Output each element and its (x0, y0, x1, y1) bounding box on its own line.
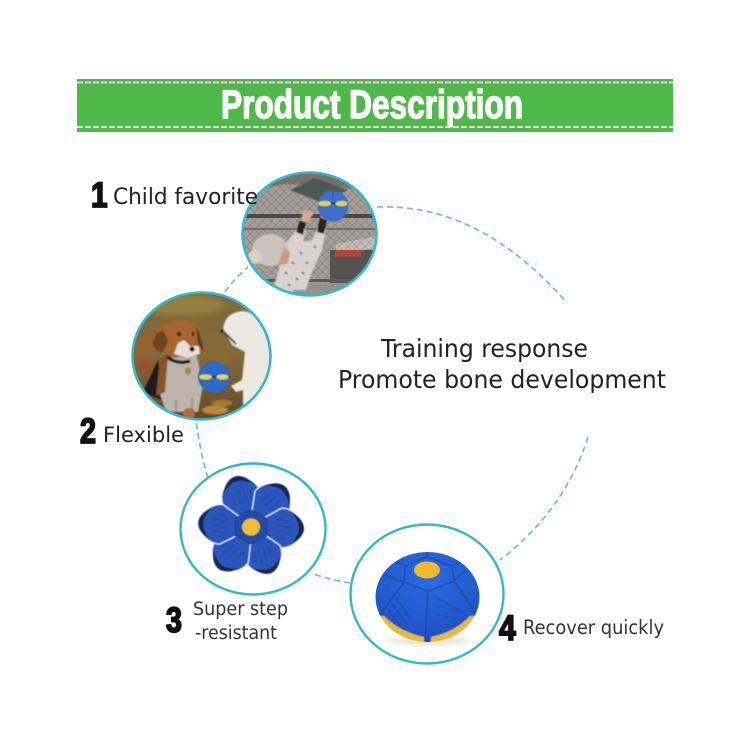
label 3: Super step-resistant: 3 (166, 600, 182, 640)
title banner (77, 79, 673, 132)
label 2: Flexible: Flexible (103, 423, 184, 447)
circle 1: child reaching for ball (240, 170, 380, 298)
label 3: Super step-resistant: -resistant (195, 623, 277, 644)
circle 4: closed ball (350, 524, 504, 664)
title text: Product Description (221, 83, 523, 127)
label 2: Flexible (80, 411, 184, 451)
label 3: Super step-resistant (166, 599, 288, 644)
label 1: Child favorite (91, 176, 258, 215)
beagle (143, 321, 204, 412)
label 3: Super step-resistant: Super step (193, 599, 288, 620)
ball in dog photo (198, 362, 230, 392)
child figure (248, 208, 327, 296)
circle 2: dogs with ball (130, 290, 274, 422)
circle 3: opened flower-shaped ball (180, 464, 326, 594)
label 4: Recover quickly: 4 (499, 608, 516, 648)
label 4: Recover quickly: Recover quickly (523, 616, 664, 639)
label 1: Child favorite: Child favorite (113, 185, 258, 210)
dashed connecting circle (196, 207, 588, 583)
white dog (220, 311, 271, 405)
label 1: Child favorite: 1 (91, 176, 108, 215)
central text (338, 334, 666, 394)
central text: Promote bone development (338, 365, 666, 394)
flying ball (318, 190, 348, 222)
leaves (183, 400, 232, 420)
central text: Training response (380, 334, 588, 363)
label 4: Recover quickly (499, 608, 664, 648)
label 2: Flexible: 2 (80, 411, 96, 451)
